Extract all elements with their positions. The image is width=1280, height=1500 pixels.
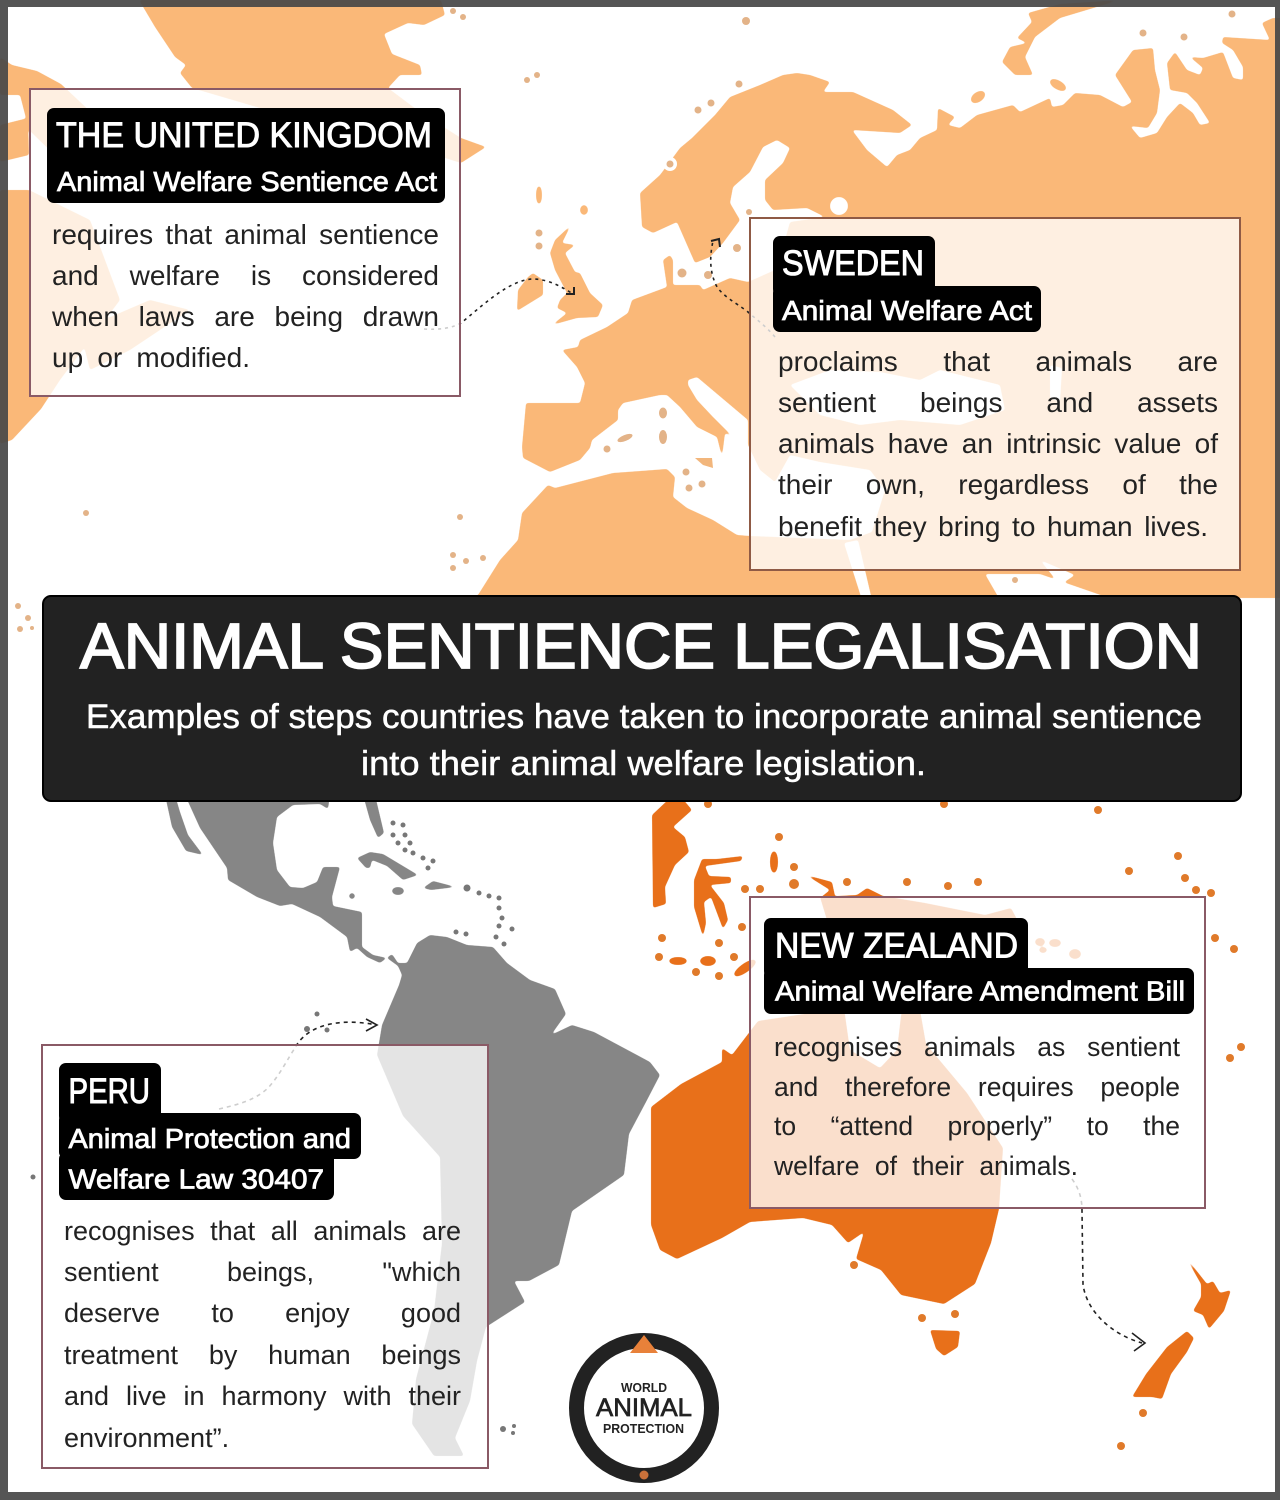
heading: sweden: SWEDEN: [782, 244, 924, 283]
heading: new zealand: NEW ZEALAND: [775, 926, 1018, 966]
text: uk act description: up or modified.: [52, 342, 250, 373]
heading: peru: Welfare Law 30407: [68, 1164, 324, 1194]
text: sweden act description: proclaims that animals are: [778, 346, 1218, 377]
heading: the united kingdom: Animal Welfare Sentience Act: [57, 166, 437, 197]
text: uk act description: when laws are being drawn: [52, 301, 439, 332]
text: peru law description: and live in harmony with their: [64, 1381, 461, 1411]
map: eurasia and north africa: [470, 18, 1280, 598]
text: peru law description: recognises that all animals are: [64, 1216, 461, 1246]
map: caribbean and pacific island dots: [30, 820, 516, 1435]
heading: the united kingdom: [47, 108, 445, 203]
text: new zealand bill description: to “attend properly” to the: [774, 1111, 1180, 1141]
text: uk act description: requires that animal sentience: [52, 219, 439, 250]
text: peru law description: [64, 1216, 461, 1453]
arrow: new zealand: [1072, 1179, 1145, 1351]
text: peru law description: deserve to enjoy good: [64, 1298, 461, 1328]
text: peru law description: environment”.: [64, 1423, 229, 1453]
text: peru law description: sentient beings, "which: [64, 1257, 461, 1287]
panel: peru: [41, 1044, 489, 1469]
map: novaya zemlya: [1002, 0, 1120, 75]
arrow: united kingdom: [424, 279, 574, 329]
title heading: ANIMAL SENTIENCE LEGALISATION: [80, 610, 1202, 682]
subtitle: into their animal welfare legislation.: [361, 745, 926, 783]
map: uk and ireland: [517, 186, 603, 325]
text: new zealand bill description: recognises animals as sentient: [774, 1032, 1180, 1062]
panel: the united kingdom: [29, 88, 461, 397]
text: sweden act description: animals have an intrinsic value of: [778, 428, 1218, 459]
logo ring: [576, 1340, 712, 1476]
text: sweden act description: [778, 346, 1218, 542]
map: light orange islands: [15, 8, 1236, 632]
arrow: sweden: [711, 239, 775, 337]
panel: sweden: [749, 217, 1241, 571]
map: oceania island dots: [655, 800, 1245, 1450]
map: indonesia, australia and new zealand (dark orange): [651, 798, 1231, 1399]
logo wordmark: ANIMAL: [596, 1394, 692, 1422]
logo orange triangle: [630, 1335, 658, 1353]
map: central and south america (grey): [165, 795, 660, 1456]
heading: peru: PERU: [68, 1072, 150, 1111]
logo wordmark: WORLD: [621, 1381, 667, 1395]
text: uk act description: and welfare is considered: [52, 260, 439, 291]
map: inland seas: [790, 197, 1115, 600]
text: new zealand bill description: welfare of their animals.: [774, 1151, 1078, 1181]
map: greenland and north america (light orange): [0, 0, 1280, 598]
logo dot: [640, 1470, 648, 1480]
title banner: [42, 595, 1242, 802]
text: new zealand bill description: and therefore requires people: [774, 1072, 1180, 1102]
heading: sweden: Animal Welfare Act: [782, 295, 1032, 326]
panel: new zealand: [749, 896, 1206, 1209]
logo wordmark: [596, 1381, 692, 1436]
text: sweden act description: their own, regardless of the: [778, 469, 1218, 500]
text: peru law description: treatment by human beings: [64, 1340, 461, 1370]
text: sweden act description: sentient beings and assets: [778, 387, 1218, 418]
text: uk act description: [52, 219, 439, 373]
heading: new zealand: [764, 918, 1194, 1014]
heading: new zealand: Animal Welfare Amendment Bill: [775, 976, 1185, 1006]
subtitle: [86, 698, 1202, 783]
heading: the united kingdom: THE UNITED KINGDOM: [56, 116, 432, 155]
logo: world animal protection: [569, 1333, 719, 1483]
logo wordmark: PROTECTION: [603, 1422, 684, 1436]
arrow: peru: [219, 1019, 377, 1109]
text: sweden act description: benefit they bring to human lives.: [778, 511, 1208, 542]
text: new zealand bill description: [774, 1032, 1180, 1181]
heading: peru: [59, 1063, 361, 1200]
heading: sweden: [773, 236, 1041, 332]
heading: peru: Animal Protection and: [68, 1123, 351, 1154]
subtitle: Examples of steps countries have taken to incorporate animal sentience: [86, 698, 1202, 736]
